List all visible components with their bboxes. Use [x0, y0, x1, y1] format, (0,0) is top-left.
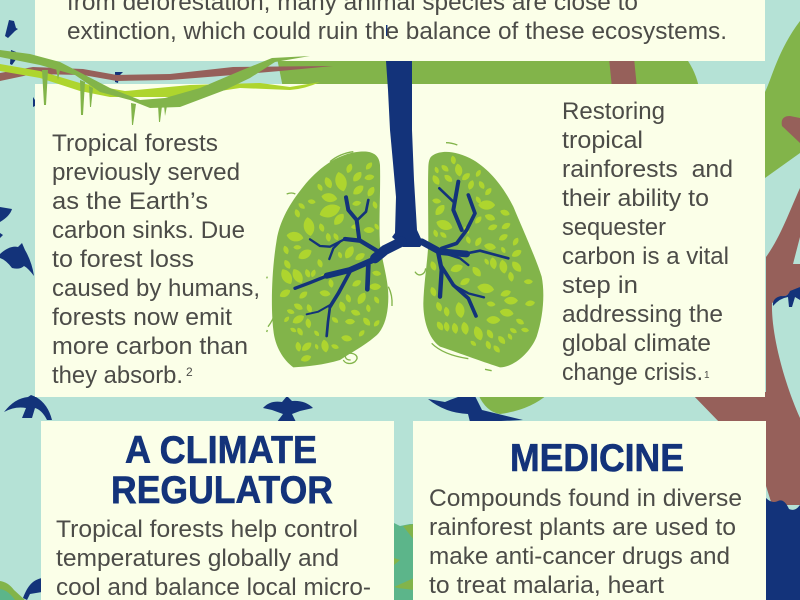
- text: climate regulator body: Tropical forests help control: [56, 516, 358, 543]
- panel: medicine: [413, 421, 766, 600]
- text: restoring rainforests: [562, 98, 733, 386]
- bird: lower centre right: [428, 396, 523, 422]
- leaf under main panel: [478, 394, 548, 414]
- text: medicine body: make anti-cancer drugs and: [429, 543, 730, 570]
- text: carbon sinks: previously served: [52, 159, 240, 186]
- text: carbon sinks: caused by humans,: [52, 275, 260, 302]
- text: medicine body: rainforest plants are used to: [429, 514, 736, 541]
- text: carbon sinks: as the Earth’s: [52, 188, 208, 215]
- bird: behind vine: [10, 50, 17, 65]
- bird: left edge fragment: [0, 207, 12, 222]
- leaves: right lung: [429, 155, 535, 354]
- text: restoring rainforests: sequester: [562, 214, 666, 241]
- heading: a climate regulator: A CLIMATE: [125, 429, 317, 472]
- panel: lungs: [35, 84, 765, 397]
- lung details: [267, 143, 492, 371]
- bird: top left: [5, 20, 18, 38]
- text: restoring rainforests: Restoring: [562, 98, 665, 125]
- text: carbon sinks: Tropical forests: [52, 130, 218, 157]
- right tree trunk and branches: [690, 188, 800, 505]
- heading: a climate regulator: [111, 429, 333, 512]
- bird: lower left: [4, 395, 52, 420]
- trachea tip over text: [386, 25, 388, 36]
- left lung: [272, 151, 388, 367]
- text: carbon sinks: carbon sinks. Due: [52, 217, 245, 244]
- bird: left edge small fragment: [0, 233, 3, 238]
- bottom right navy foliage: [766, 498, 800, 600]
- text: carbon sinks: to forest loss: [52, 246, 194, 273]
- lungs illustration: [267, 143, 543, 371]
- heading: a climate regulator: REGULATOR: [111, 469, 333, 512]
- text: medicine body: to treat malaria, heart: [429, 572, 664, 599]
- text: restoring rainforests: rainforests and: [562, 156, 733, 183]
- text: restoring rainforests: global climate: [562, 330, 711, 357]
- hanging vines: [0, 50, 333, 125]
- text: carbon sinks: more carbon than: [52, 333, 248, 360]
- text: climate regulator body: temperatures globally and: [56, 545, 339, 572]
- text: restoring rainforests: addressing the: [562, 301, 723, 328]
- text: deforestation: [67, 0, 727, 45]
- text: deforestation: extinction, which could ruin the balance of these ecosystems.: [67, 18, 727, 45]
- text: restoring rainforests: carbon is a vital: [562, 243, 729, 270]
- text: carbon sinks: they absorb.: [52, 362, 183, 389]
- plant: bottom left: [0, 581, 25, 600]
- bird: bottom left: [23, 578, 42, 600]
- leaves: left lung: [278, 161, 382, 363]
- text: restoring rainforests: their ability to: [562, 185, 709, 212]
- text: medicine body: Compounds found in diverse: [429, 485, 742, 512]
- trachea: [386, 61, 423, 247]
- panel: a climate regulator: [41, 421, 394, 600]
- bird: small left: [33, 97, 35, 107]
- right tree foliage: [765, 21, 800, 178]
- bird: small behind vine: [115, 72, 123, 83]
- right tree small branch: [782, 116, 800, 143]
- heading: medicine: MEDICINE: [510, 437, 684, 480]
- text: carbon sinks: forests now emit: [52, 304, 232, 331]
- bird: lower centre: [263, 396, 313, 422]
- text: carbon sinks: [52, 130, 260, 389]
- panel: top text: [35, 0, 765, 61]
- text: medicine body: [429, 485, 742, 599]
- tree trunk segment: [609, 58, 637, 88]
- text: climate regulator body: [56, 516, 371, 600]
- bird: left edge large: [0, 243, 34, 276]
- plant: central gap: [394, 523, 414, 600]
- text: restoring rainforests: 1: [704, 370, 710, 381]
- text: carbon sinks: 2: [186, 365, 193, 379]
- bronchi: [295, 182, 508, 336]
- tree canopy behind panels: [277, 58, 699, 88]
- right branch bird: [773, 287, 800, 307]
- right lung: [423, 152, 543, 367]
- text: restoring rainforests: step in: [562, 272, 638, 299]
- text: restoring rainforests: change crisis.: [562, 359, 703, 386]
- text: restoring rainforests: tropical: [562, 127, 643, 154]
